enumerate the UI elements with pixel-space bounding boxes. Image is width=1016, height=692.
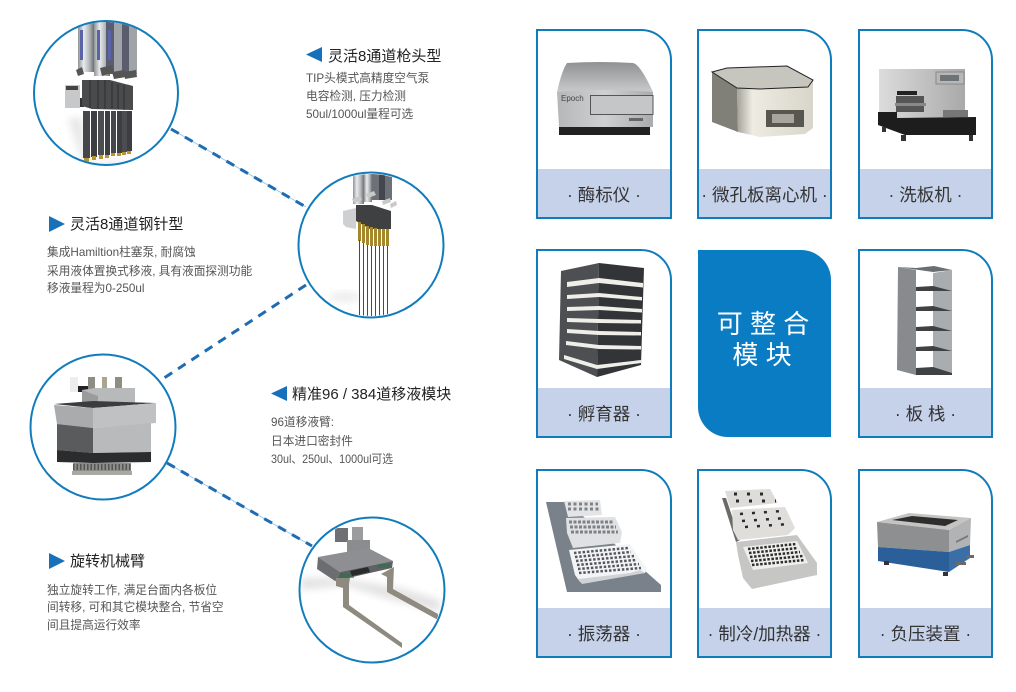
connector: circle 3 to circle 4 xyxy=(167,463,312,546)
icon: shaker plates xyxy=(546,500,661,592)
panel: vacuum device xyxy=(859,470,992,657)
heading: 灵活8通道枪头型 xyxy=(328,48,441,65)
label: · 微孔板离心机 · xyxy=(701,185,828,205)
icon: module body xyxy=(54,401,156,463)
icon: grey side box xyxy=(65,85,84,108)
description: 50ul/1000ul量程可选 xyxy=(306,108,414,121)
description xyxy=(47,583,224,632)
description: 采用液体置换式移液, 具有液面探测功能 xyxy=(47,264,252,278)
panel: incubator xyxy=(537,250,671,437)
description: 间转移, 可和其它模块整合, 节省空 xyxy=(47,600,224,614)
description: 30ul、250ul、1000ul可选 xyxy=(271,453,393,466)
label: · 板 栈 · xyxy=(895,404,956,424)
description: 日本进口密封件 xyxy=(271,434,353,448)
label: · 负压装置 · xyxy=(880,624,971,644)
icon: left arrow xyxy=(271,386,287,401)
circle: 8-channel tip head xyxy=(34,20,178,168)
icon: washer xyxy=(878,69,976,141)
icon: left arrow xyxy=(306,47,322,62)
icon: upper housing xyxy=(82,388,135,407)
description: 96道移液臂: xyxy=(271,415,334,429)
icon: steel needles xyxy=(360,240,388,316)
connector: circle 1 to circle 2 xyxy=(171,129,306,207)
icon: black tubes with gold tips xyxy=(83,111,132,162)
text block: 96/384 module xyxy=(271,386,451,466)
label: · 振荡器 · xyxy=(567,624,641,644)
circle: 96/384 channel module xyxy=(30,354,176,500)
connector: circle 2 to circle 3 xyxy=(161,285,306,380)
description: 独立旋转工作, 满足台面内各板位 xyxy=(47,583,217,597)
panel: cooler/heater xyxy=(698,470,831,657)
icon: incubator tower xyxy=(559,263,644,377)
heading: 精准96 / 384道移液模块 xyxy=(292,386,451,403)
icon: plate reader: Epoch xyxy=(561,94,584,103)
icon: mounting column xyxy=(335,527,370,552)
description xyxy=(47,245,252,295)
icon: silver columns xyxy=(352,172,397,208)
icon: dark manifold xyxy=(356,205,391,229)
description: 间且提高运行效率 xyxy=(47,618,141,632)
panel: plate stack xyxy=(859,250,992,437)
text block: rotating arm xyxy=(47,553,224,632)
text block: tip head xyxy=(306,47,441,121)
label: · 制冷/加热器 · xyxy=(708,624,821,644)
description xyxy=(271,415,393,466)
heading: 灵活8通道钢针型 xyxy=(70,216,183,233)
heading xyxy=(717,309,809,370)
text block: steel needle xyxy=(47,216,252,295)
panel: microplate centrifuge xyxy=(698,30,831,218)
icon: silver pipette columns xyxy=(76,20,137,79)
circle: rotating arm gripper xyxy=(300,518,444,662)
icon: right arrow xyxy=(49,553,65,569)
icon: right arm xyxy=(381,567,438,620)
label: · 孵育器 · xyxy=(567,404,641,424)
icon: plate rack xyxy=(897,266,952,375)
description: 电容检测, 压力检测 xyxy=(306,89,406,103)
icon: vacuum manifold xyxy=(877,513,974,576)
panel: plate washer xyxy=(859,30,992,218)
icon: floor shadow xyxy=(332,292,358,302)
panel: shaker xyxy=(537,470,671,657)
circle: 8-channel steel needle xyxy=(298,172,444,318)
heading: 可 整 合 xyxy=(717,309,809,339)
description: 移液量程为0-250ul xyxy=(47,281,144,295)
label: · 洗板机 · xyxy=(889,185,962,205)
icon: cooling and heating blocks xyxy=(722,489,817,589)
heading: 模 块 xyxy=(732,340,792,370)
icon: right arrow xyxy=(49,216,65,232)
icon: top posts xyxy=(70,377,122,392)
icon: plate reader xyxy=(557,62,653,135)
icon: left arm xyxy=(336,578,402,648)
icon: gripper plate xyxy=(317,548,393,581)
icon: grey side box xyxy=(343,208,356,229)
icon: gold tips xyxy=(358,222,389,246)
icon: pin array xyxy=(72,463,132,475)
icon: floor reflection xyxy=(300,578,440,612)
label: · 酶标仪 · xyxy=(567,185,641,205)
description: 集成Hamiltion柱塞泵, 耐腐蚀 xyxy=(47,245,196,259)
icon: dark manifold block xyxy=(82,80,133,110)
icon: centrifuge xyxy=(712,66,813,137)
description: TIP头模式高精度空气泵 xyxy=(306,71,430,85)
icon: floor shadow xyxy=(68,116,121,164)
heading: 旋转机械臂 xyxy=(70,553,145,570)
description xyxy=(306,71,430,121)
panel: plate reader xyxy=(537,30,671,218)
panel: central title card xyxy=(698,250,831,437)
